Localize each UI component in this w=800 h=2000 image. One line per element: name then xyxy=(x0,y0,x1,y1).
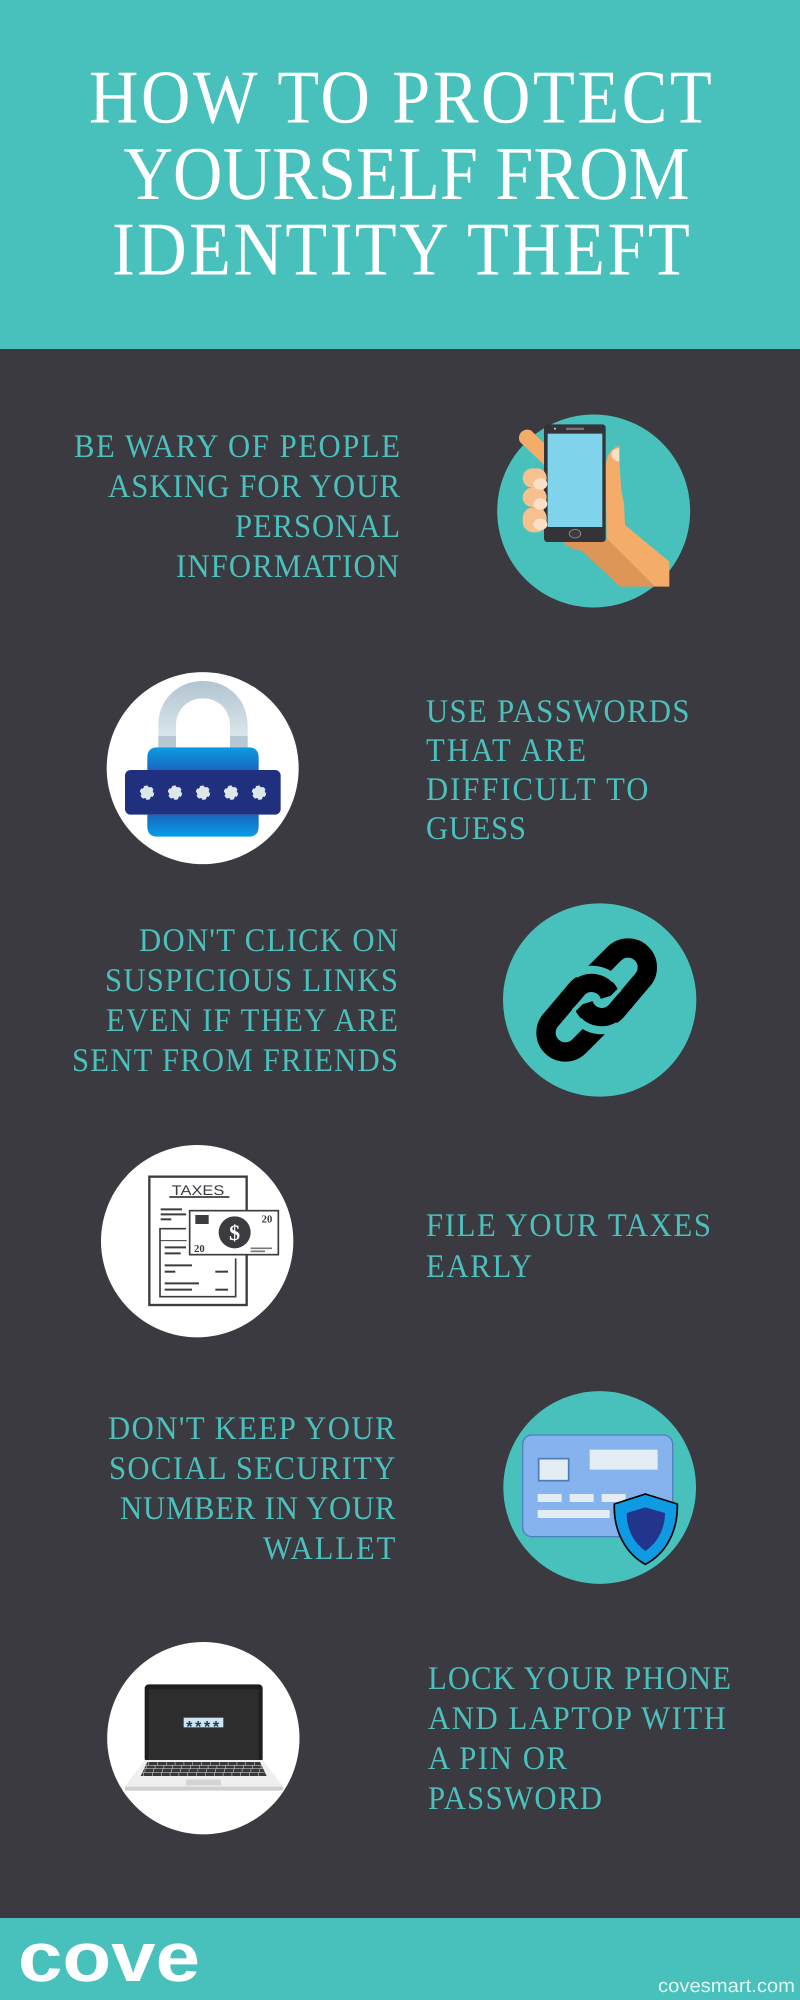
text: lock your phone: AND LAPTOP WITH xyxy=(428,1701,726,1737)
logo: cove: cove xyxy=(18,1918,200,1996)
panel: footer xyxy=(0,1918,800,2000)
text: lock your phone xyxy=(428,1661,731,1817)
text: don't click: SENT FROM FRIENDS xyxy=(72,1043,398,1079)
icon: tax form and banknote xyxy=(101,1145,293,1337)
title: HOW TO PROTECT xyxy=(89,56,712,140)
text: file your taxes xyxy=(426,1208,711,1285)
panel: header xyxy=(0,0,800,349)
text: be wary of people xyxy=(74,429,400,585)
icon: tax form and banknote: $ xyxy=(229,1221,240,1245)
icon: laptop with password: **** xyxy=(186,1718,222,1736)
text: don't click: EVEN IF THEY ARE xyxy=(106,1003,398,1039)
text: be wary of people: PERSONAL xyxy=(235,509,400,545)
title: YOURSELF FROM xyxy=(124,132,690,216)
icon: credit card and shield xyxy=(503,1391,696,1584)
text: don't click: DON'T CLICK ON xyxy=(139,923,398,959)
text: file your taxes: FILE YOUR TAXES xyxy=(426,1208,711,1244)
text: be wary of people: BE WARY OF PEOPLE xyxy=(74,429,400,465)
text: file your taxes: EARLY xyxy=(426,1249,532,1285)
icon: tax form and banknote: TAXES xyxy=(172,1182,224,1198)
website url: covesmart.com xyxy=(658,1976,795,1997)
text: don't keep: NUMBER IN YOUR xyxy=(120,1491,395,1527)
text: don't click xyxy=(72,923,398,1079)
panel: tip 2 passwords xyxy=(107,672,689,864)
icon: tax form and banknote: 20 xyxy=(194,1242,205,1254)
icon: chain link xyxy=(503,903,696,1097)
text: don't click: SUSPICIOUS LINKS xyxy=(105,963,398,999)
text: lock your phone: A PIN OR xyxy=(428,1741,567,1777)
text: don't keep: WALLET xyxy=(263,1531,395,1567)
panel: tip 5 social security xyxy=(108,1391,696,1584)
panel: tip 3 suspicious links xyxy=(72,903,696,1097)
icon: padlock with password xyxy=(107,672,299,864)
icon: tax form and banknote: 20 xyxy=(262,1213,272,1225)
icon: hand holding phone xyxy=(497,414,690,607)
title xyxy=(89,56,712,292)
text: use passwords xyxy=(426,694,689,847)
text: lock your phone: LOCK YOUR PHONE xyxy=(428,1661,731,1697)
panel: tip 1 personal information xyxy=(74,414,690,607)
text: use passwords: USE PASSWORDS xyxy=(426,694,689,730)
text: don't keep: SOCIAL SECURITY xyxy=(109,1451,395,1487)
text: don't keep: DON'T KEEP YOUR xyxy=(108,1411,395,1447)
text: be wary of people: INFORMATION xyxy=(176,549,399,585)
icon: laptop with password xyxy=(107,1642,299,1834)
panel: tip 6 lock devices xyxy=(107,1642,731,1834)
title: IDENTITY THEFT xyxy=(112,208,690,292)
text: don't keep xyxy=(108,1411,395,1567)
text: lock your phone: PASSWORD xyxy=(428,1781,602,1817)
text: use passwords: DIFFICULT TO xyxy=(426,772,648,808)
panel: tip 4 taxes xyxy=(101,1145,711,1337)
text: be wary of people: ASKING FOR YOUR xyxy=(108,469,400,505)
text: use passwords: GUESS xyxy=(426,811,526,847)
text: use passwords: THAT ARE xyxy=(426,733,586,769)
